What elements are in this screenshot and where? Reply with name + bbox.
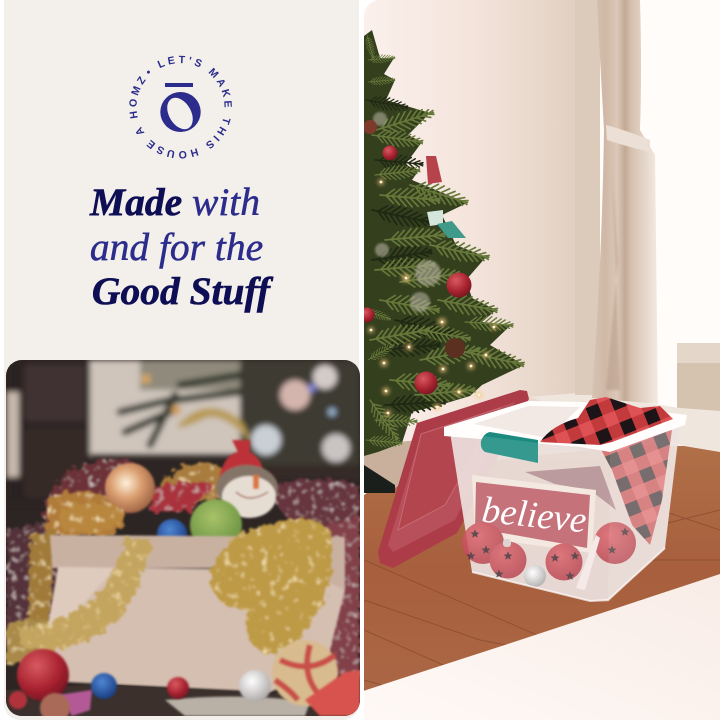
panel: cream text panel <box>4 0 359 720</box>
blurred room background <box>6 360 360 482</box>
tinsel behind box <box>6 459 360 680</box>
icon: red figure ornament <box>426 156 442 184</box>
sign text: believe <box>480 490 588 541</box>
floor <box>364 445 720 692</box>
tree skirt floor edge <box>364 440 412 488</box>
tag <box>576 535 600 590</box>
tree skirt <box>364 465 395 493</box>
light fronds <box>364 34 526 449</box>
handle <box>481 432 538 463</box>
title <box>89 180 274 313</box>
icon: snowman ornament <box>216 440 278 518</box>
logo: macron o mark <box>160 83 201 134</box>
icon: red baubles <box>360 120 472 394</box>
window light <box>600 0 720 460</box>
icon: red ornament <box>17 649 69 701</box>
logo: circular slogan: • LET'S MAKE THIS HOUSE A HOMZ <box>129 56 232 158</box>
bin back and body <box>450 436 678 601</box>
rim <box>444 401 687 452</box>
icon: small red ornament <box>167 677 189 699</box>
curtain tieback <box>606 125 650 152</box>
icon: teal ornaments <box>427 210 466 238</box>
pale ornaments in tree <box>373 112 441 312</box>
dark fronds <box>365 94 455 414</box>
storage bin <box>444 397 687 602</box>
rug <box>360 574 720 720</box>
icon: blue ornament <box>91 673 117 699</box>
wall <box>364 0 600 460</box>
tree lights <box>368 179 497 416</box>
icon: gold bauble <box>105 463 155 513</box>
panel: photo of box with tinsel <box>6 360 360 720</box>
christmas tree <box>360 30 526 456</box>
title line 3: Good Stuff <box>92 269 274 313</box>
bin front wall <box>450 432 610 602</box>
blanket inside bin <box>600 430 672 545</box>
panel: photo of storage bin by tree <box>360 0 720 720</box>
sign <box>472 475 596 553</box>
cardboard box <box>47 535 345 692</box>
lower wall and sill <box>530 343 720 452</box>
plaid blanket <box>540 397 673 445</box>
baubles inside bin <box>462 522 636 590</box>
title line 2: and for the <box>90 225 263 269</box>
icon: blue bauble <box>156 518 188 538</box>
gold tinsel garlands <box>20 502 332 654</box>
pink bauble <box>58 690 92 716</box>
icon: patterned ornament <box>272 640 338 706</box>
red ribbon <box>305 670 360 716</box>
table and ornaments foreground <box>6 640 360 720</box>
icon: green bauble <box>188 498 244 538</box>
icon: pine cone <box>445 338 465 358</box>
title line 1: Made with <box>89 180 260 224</box>
icon: silver ornament <box>239 670 271 702</box>
curtain <box>575 0 658 404</box>
lid <box>378 390 529 568</box>
logo badge <box>129 56 232 158</box>
